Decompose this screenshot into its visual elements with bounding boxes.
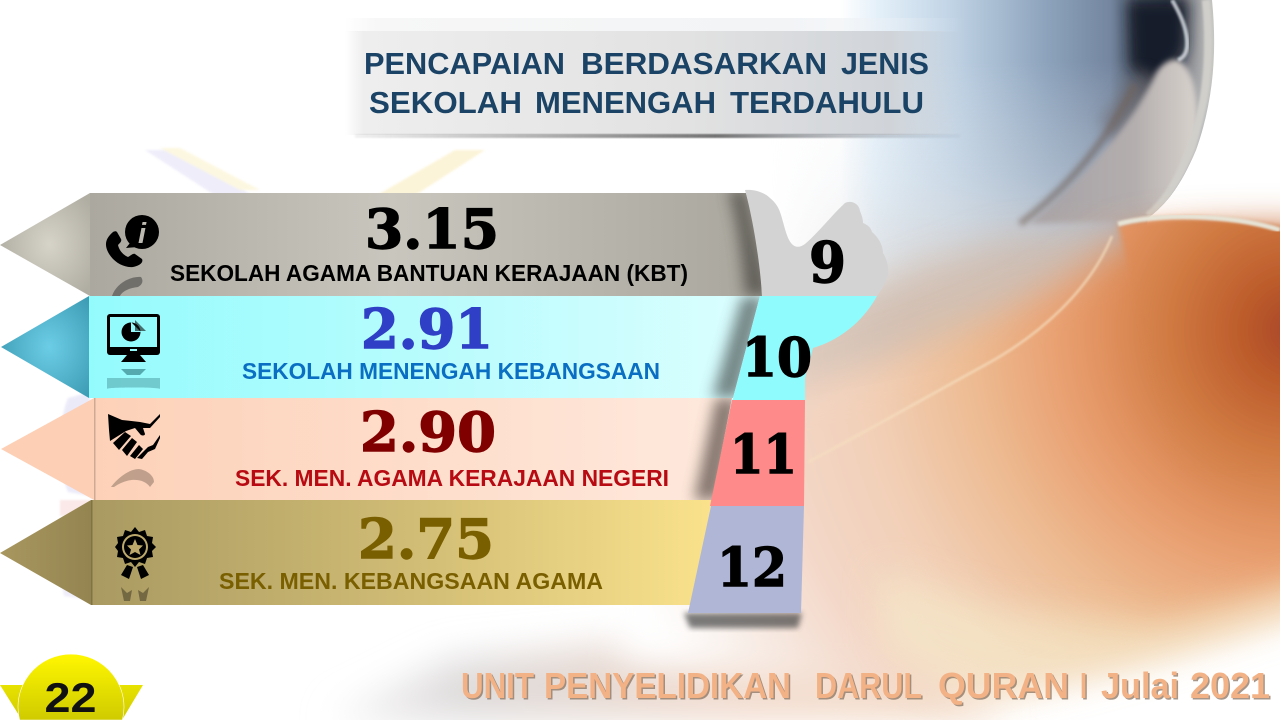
row 2: SMK (1, 296, 765, 398)
footer credit: QURAN (938, 665, 1069, 706)
footer credit: PENYELIDIKAN (544, 665, 791, 706)
arrow head (0, 193, 90, 296)
value: 2.91 (361, 297, 493, 361)
icon reflection (121, 587, 149, 601)
label: SEKOLAH AGAMA BANTUAN KERAJAAN (KBT) (170, 260, 688, 286)
title text: BERDASARKAN (581, 46, 827, 81)
footer credit (461, 665, 1272, 708)
thumbs-up ranking graphic: 10 (742, 327, 812, 389)
thumb: blue segment rank 12 (688, 506, 804, 613)
value: 2.75 (358, 507, 494, 571)
footer credit: Julai (1102, 666, 1180, 708)
title text: JENIS (841, 46, 929, 81)
icon: phone with info bubble (106, 215, 159, 267)
icon reflection (107, 369, 160, 389)
thumbs-up ranking graphic (684, 190, 888, 628)
footer credit: I (1082, 666, 1088, 708)
thumbs-up ranking graphic: 11 (730, 424, 797, 486)
value: 2.90 (360, 400, 496, 464)
icon: phone with info bubble: i (138, 218, 147, 250)
page number badge (0, 654, 143, 720)
footer credit: QURAN (940, 666, 1070, 708)
icon reflection (112, 277, 142, 296)
footer credit: Julai (1101, 665, 1179, 706)
footer credit: UNIT (461, 665, 534, 706)
icon: handshake (108, 414, 160, 459)
faint logo watermark (60, 148, 485, 600)
row 4: SMKA (0, 500, 712, 605)
icon reflection (111, 469, 154, 487)
value: 3.15 (365, 197, 499, 261)
title text (364, 46, 929, 120)
bar (91, 500, 712, 605)
arrow head (1, 296, 89, 398)
thumb: cyan segment rank 10 (732, 296, 877, 402)
footer credit: UNIT (462, 666, 536, 708)
thumb bottom shadow (684, 613, 802, 628)
thumb: red segment rank 11 (710, 400, 805, 506)
title text: TERDAHULU (730, 85, 924, 120)
icon: award rosette (115, 527, 156, 579)
title banner (345, 18, 965, 138)
thumb: grey segment rank 9 (745, 190, 888, 296)
rank numbers: 9 (809, 230, 846, 296)
footer credit: 2021 (1190, 665, 1270, 706)
footer credit: DARUL (816, 666, 924, 708)
row 3: SMAKN (1, 398, 738, 500)
title text: MENENGAH (535, 85, 716, 120)
footer credit: DARUL (815, 665, 922, 706)
bar (89, 296, 760, 398)
orange shoulder (805, 225, 1108, 403)
footer credit: I (1080, 665, 1087, 706)
bar (90, 193, 762, 296)
arrow head (0, 500, 91, 605)
background photo wash (367, 0, 1280, 720)
footer credit: PENYELIDIKAN (546, 666, 792, 708)
icon: monitor with pie chart (107, 314, 160, 362)
label: SEK. MEN. AGAMA KERAJAAN NEGERI (235, 465, 669, 491)
label: SEK. MEN. KEBANGSAAN AGAMA (219, 568, 603, 594)
row 1: KBT (0, 190, 770, 296)
label: SEKOLAH MENENGAH KEBANGSAAN (242, 358, 660, 384)
footer credit: 2021 (1192, 666, 1272, 708)
arrow head (1, 398, 94, 500)
title text: PENCAPAIAN (364, 46, 565, 81)
thumbs-up ranking graphic: 12 (717, 537, 787, 599)
sphere (840, 0, 1214, 348)
title text: SEKOLAH (369, 85, 522, 120)
page number badge: 22 (44, 674, 96, 720)
bar (94, 398, 732, 500)
